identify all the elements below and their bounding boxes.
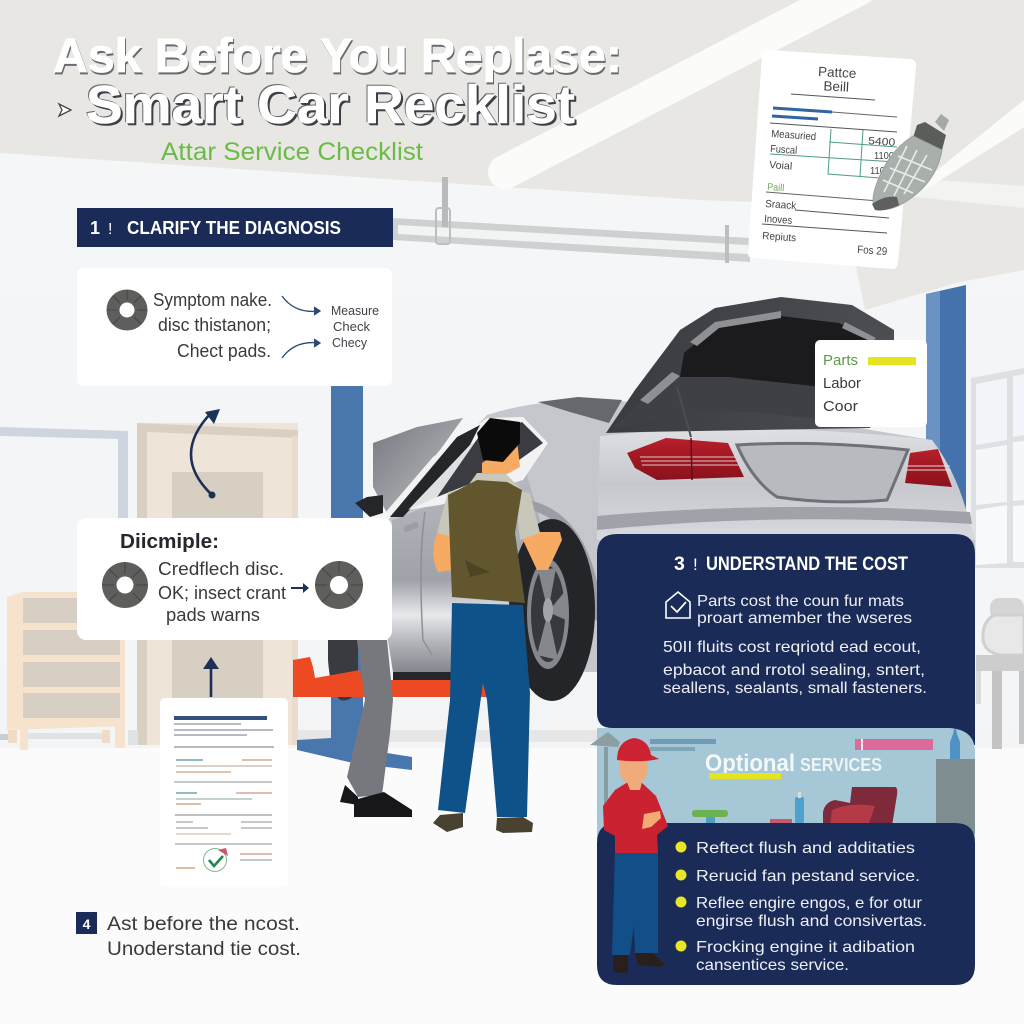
panel: disc example card: OK; insect crant: [158, 583, 286, 603]
car cost tag: Labor: [823, 375, 861, 392]
step 4 note: 4: [83, 916, 91, 932]
icon: shield check: [666, 592, 690, 618]
panel: understand the cost: 50II fluits cost reqriotd ead ecout,: [663, 639, 921, 656]
panel: disc example card: [77, 518, 392, 640]
parts bill document: 1100: [874, 150, 894, 162]
panel: symptom card: [77, 268, 392, 386]
mechanic: [433, 418, 562, 833]
parts bill document: Sraack: [765, 198, 797, 212]
panel: symptom card: Checy: [332, 336, 368, 350]
hand: [642, 811, 661, 829]
gas strut: [677, 387, 691, 437]
parts bill document: Pattce: [818, 64, 857, 81]
trunk recess: [737, 443, 908, 502]
panel: understand the cost: proart amember the wseres: [697, 610, 912, 627]
parts bill document: Paill: [767, 182, 785, 194]
panel: symptom card: Measure: [331, 304, 379, 318]
neck and collar: [465, 473, 522, 490]
rim: [527, 559, 569, 669]
service advisor figure: [603, 738, 668, 973]
parts bill document: Inoves: [764, 213, 793, 227]
dark glass: [390, 425, 480, 517]
parts bill document: 5400: [868, 135, 896, 149]
arrow to right disc: [291, 583, 309, 593]
parts bill document: Voial: [769, 159, 793, 173]
icon: left disc: [102, 562, 148, 608]
floor skirting: [0, 730, 598, 745]
armchair: [823, 787, 897, 826]
arrows to checks: [282, 296, 320, 358]
car cost tag: Coor: [823, 398, 858, 415]
title: Ask Before You Replase:: [53, 30, 622, 83]
icon: key fob: [872, 114, 949, 210]
panel: optional services list: engirse flush and consivertas.: [696, 913, 927, 930]
side window chrome: [385, 417, 548, 513]
panel: optional services list: Frocking engine it adibation: [696, 939, 915, 956]
open bonnet: [373, 418, 463, 513]
door line and handle: [421, 512, 432, 655]
left taillight: [627, 438, 744, 480]
panel: optional services scene: Optional: [705, 750, 795, 777]
ceiling lift rail: [393, 177, 750, 263]
left window frame: [0, 427, 128, 640]
panel: clarify the diagnosis header: !: [108, 221, 112, 238]
car cost tag: [815, 340, 927, 427]
far wheel: [328, 640, 358, 701]
panel: optional services list: [597, 823, 975, 985]
sill shadow: [393, 668, 513, 680]
parts bill document: [748, 50, 916, 269]
legs: [438, 603, 530, 817]
parts bill document: Fuscal: [770, 143, 798, 157]
open trunk lid: [606, 297, 894, 433]
lid lower band: [613, 377, 870, 428]
panel: symptom card: disc thistanon;: [158, 315, 271, 335]
car: [293, 297, 975, 701]
step 4 note: [76, 912, 301, 960]
wooden shelf: [7, 592, 125, 750]
bumper band: [597, 507, 972, 530]
panel: optional services list: Rerucid fan pestand service.: [696, 868, 920, 885]
tyre: [509, 519, 595, 701]
arrow: up from report: [203, 657, 219, 697]
step 4 note: Ast before the ncost.: [107, 914, 300, 935]
door panel: [388, 468, 540, 672]
vest: [448, 480, 525, 603]
cap: [617, 738, 659, 761]
panel: optional services scene: SERVICES: [800, 755, 882, 775]
shoes: [613, 953, 665, 973]
panel: clarify the diagnosis header: 1: [90, 218, 100, 238]
panel: clarify the diagnosis header: [77, 208, 393, 247]
right window: [971, 368, 1024, 568]
car cost tag: Parts: [823, 352, 858, 369]
parts bill document: Beill: [823, 78, 849, 95]
panel: optional services list: Reflee engire engos, e for otur: [696, 895, 923, 912]
mirror: [355, 495, 383, 517]
right taillight: [905, 449, 952, 487]
arms: [433, 533, 453, 572]
face: [619, 758, 648, 785]
step 4 note: Unoderstand tie cost.: [107, 939, 301, 960]
panel: understand the cost: seallens, sealants, small fasteners.: [663, 680, 927, 697]
panel: understand the cost: 3: [674, 553, 685, 575]
icon: right disc: [315, 561, 363, 609]
parts bill document: Fos 29: [857, 244, 888, 258]
lid light strips: [640, 311, 876, 404]
panel: symptom card: Chect pads.: [177, 341, 271, 361]
workshop machine: [976, 598, 1024, 749]
report document: [160, 698, 288, 886]
cabinet door: [137, 423, 298, 745]
shirt: [603, 782, 668, 853]
panel: disc example card: Credflech disc.: [158, 559, 284, 579]
red lift arm: [293, 657, 500, 697]
boots: [433, 813, 463, 832]
blue lift columns: [297, 285, 966, 770]
small table: [692, 810, 728, 827]
panel: understand the cost: epbacot and rrotol sealing, sntert,: [663, 662, 925, 679]
sleeves: [437, 490, 457, 537]
roof reflection: [538, 397, 622, 423]
panel: understand the cost: [597, 534, 975, 745]
icon: approval check stamp: [204, 848, 228, 872]
panel: understand the cost: Parts cost the coun fur mats: [697, 593, 904, 610]
parts bill document: Repiuts: [762, 230, 797, 244]
car body: [388, 400, 975, 672]
lid interior: [680, 315, 880, 390]
parts bill document: 110: [870, 165, 885, 177]
title: Smart Car Recklist: [86, 75, 575, 135]
subtitle: Attar Service Checklist: [161, 138, 423, 166]
grey-trousered person behind card: [340, 640, 412, 817]
bottle: [770, 792, 804, 825]
panel: symptom card: Check: [333, 320, 371, 334]
title: [53, 30, 622, 135]
icon: brake disc: [106, 290, 148, 330]
panel: disc example card: Diicmiple:: [120, 531, 219, 553]
hair: [477, 418, 520, 462]
parts bill document: Measuried: [771, 128, 817, 143]
rear deck: [597, 429, 975, 540]
panel: optional services list: Reftect flush and additaties: [696, 840, 915, 857]
arrow: curved between cards: [191, 409, 220, 498]
trousers: [612, 852, 658, 955]
panel: clarify the diagnosis header: CLARIFY THE DIAGNOSIS: [127, 217, 341, 238]
panel: optional services scene: [590, 728, 975, 840]
panel: understand the cost: UNDERSTAND THE COST: [706, 553, 908, 575]
panel: disc example card: pads warns: [166, 605, 260, 625]
panel: symptom card: Symptom nake.: [153, 290, 272, 310]
panel: optional services list: cansentices service.: [696, 957, 849, 974]
panel: understand the cost: !: [693, 555, 698, 574]
wheel arch: [530, 505, 598, 620]
